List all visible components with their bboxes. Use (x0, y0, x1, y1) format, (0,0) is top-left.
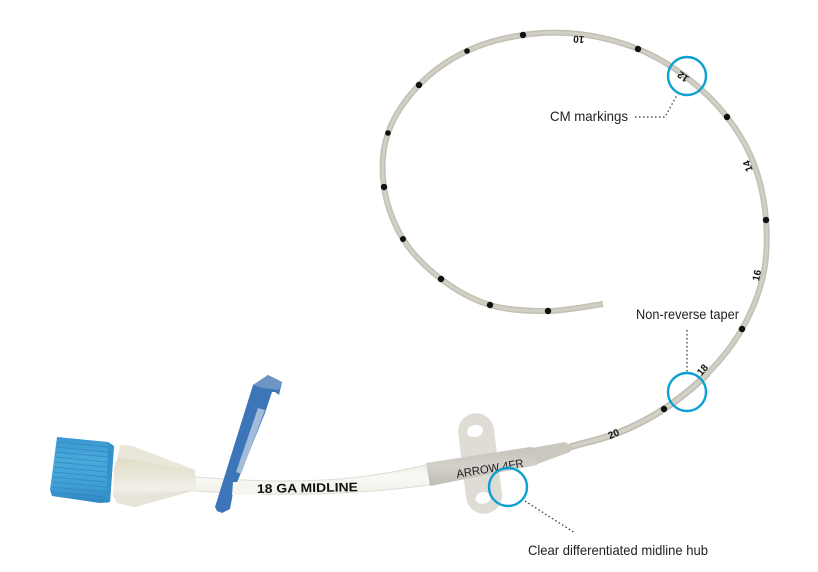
callout: CM markings (550, 57, 706, 124)
cm number markings: 20 (607, 427, 622, 442)
cm dot markings (381, 32, 769, 412)
cm number markings: 10 (572, 33, 585, 44)
callout: non-reverse taper (636, 306, 739, 411)
tube label: 18 GA MIDLINE (257, 480, 358, 496)
blue clamp (215, 375, 282, 513)
cm number markings (572, 33, 764, 442)
cm number markings: 18 (695, 362, 711, 378)
callout: CM markings: CM markings (550, 108, 628, 124)
cm number markings: 14 (741, 158, 756, 173)
hub label: ARROW 4FR (456, 458, 525, 481)
midline hub body (426, 442, 573, 486)
blue luer cap (50, 437, 114, 503)
catheter tube curve (383, 33, 767, 447)
callout: midline hub (489, 468, 708, 558)
tube in front of clamp (232, 482, 262, 495)
callout: non-reverse taper: Non-reverse taper (636, 306, 739, 322)
cm number markings: 16 (751, 268, 764, 282)
luer connector hub (113, 445, 196, 507)
callout: midline hub: Clear differentiated midline hub (528, 542, 708, 558)
white extension tube (195, 464, 433, 494)
cm number markings: 12 (675, 68, 691, 84)
hub wings with suture holes (456, 411, 504, 516)
